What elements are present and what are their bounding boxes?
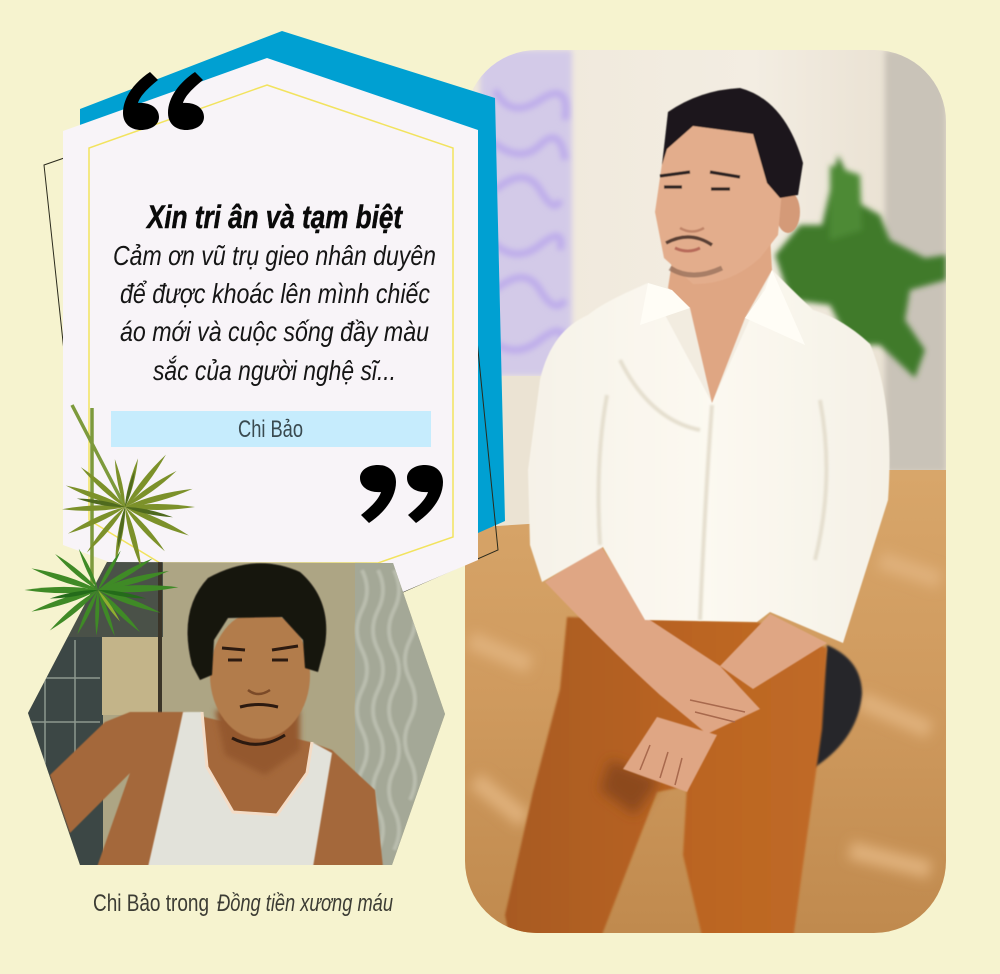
brows and eyes — [660, 172, 740, 189]
stool — [812, 645, 862, 769]
quote body: áo mới và cuộc sống đầy màu — [120, 316, 429, 347]
nose — [248, 690, 270, 694]
thin black hexagon outline — [44, 90, 498, 592]
facial features — [222, 646, 298, 744]
photo caption: Đồng tiền xương máu — [217, 890, 393, 917]
trouser shading — [600, 760, 660, 815]
quote body — [113, 240, 436, 386]
blue hexagon backing — [80, 31, 505, 533]
neck and chest shade — [215, 710, 300, 775]
attribution bar: Chi Bảo — [238, 416, 303, 443]
collar right — [745, 270, 805, 345]
neck and open collar — [668, 235, 772, 403]
finger creases — [640, 700, 745, 785]
quote body: sắc của người nghệ sĩ... — [153, 355, 396, 386]
head — [655, 88, 803, 284]
collar left — [648, 283, 690, 316]
palm plant lower — [25, 548, 179, 637]
singlet neckline trim — [202, 712, 312, 815]
orange trousers — [505, 617, 827, 940]
white singlet — [148, 712, 332, 867]
quote body: để được khoác lên mình chiếc — [120, 278, 430, 309]
moustache and mouth — [666, 237, 712, 245]
photo backdrop: wall and floor — [465, 50, 946, 933]
nose — [680, 228, 704, 232]
ear — [778, 194, 800, 234]
goatee — [670, 268, 722, 275]
white shirt — [528, 270, 889, 643]
torso and arms — [50, 712, 383, 867]
quote body: Cảm ơn vũ trụ gieo nhân duyên — [113, 240, 436, 271]
quote title: Xin tri ân và tạm biệt — [145, 199, 403, 235]
face — [210, 611, 310, 739]
forearms and hands — [545, 545, 827, 792]
palm plant upper — [62, 405, 195, 590]
lips — [675, 248, 700, 251]
face — [655, 118, 782, 284]
small photo: Đồng tiền xương máu — [28, 562, 448, 867]
white quote panel — [63, 58, 478, 620]
closing quotation mark — [360, 465, 443, 523]
photo caption — [93, 890, 393, 917]
background plant — [775, 155, 946, 378]
attribution bar — [111, 411, 431, 447]
hair — [662, 88, 803, 198]
main photo: Chi Bảo seated — [465, 50, 946, 940]
palm fronds upper — [62, 453, 195, 569]
thin yellow hexagon outline — [89, 85, 453, 563]
film still backdrop — [28, 562, 448, 867]
opening quotation mark — [123, 72, 204, 130]
palm stems — [72, 405, 125, 590]
photo caption: Chi Bảo trong — [93, 890, 209, 917]
curly hair — [188, 563, 326, 680]
shirt fold shading — [599, 360, 826, 620]
